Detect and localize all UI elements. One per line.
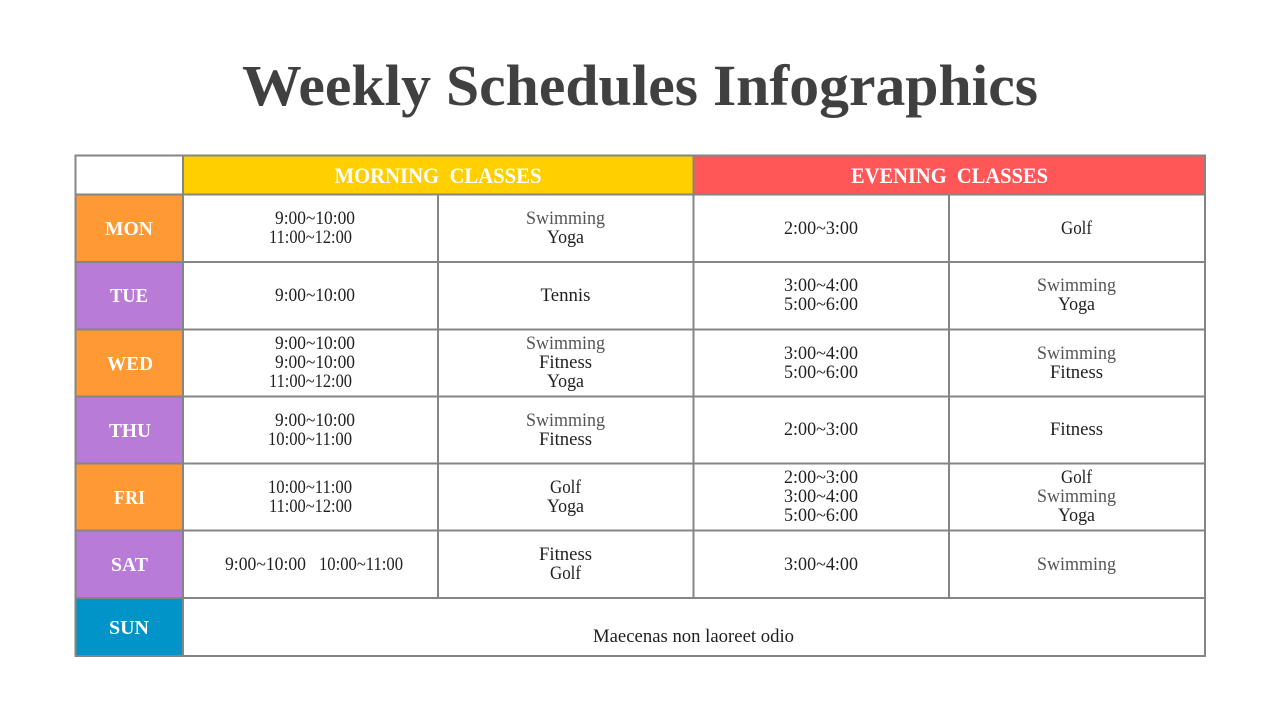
Friday classes: Yoga xyxy=(547,497,584,517)
Wednesday classes: Fitness xyxy=(539,353,592,373)
Wednesday classes: 9:00~10:00 xyxy=(275,334,355,354)
Monday classes: 11:00~12:00 xyxy=(269,228,352,248)
day: Monday: MON xyxy=(105,218,154,240)
title: Weekly Schedules Infographics xyxy=(242,53,1038,118)
Tuesday classes: 3:00~4:00 xyxy=(784,276,858,296)
Wednesday classes: Swimming xyxy=(1037,344,1116,364)
day: Monday xyxy=(76,194,183,262)
Wednesday classes: 11:00~12:00 xyxy=(269,372,352,392)
Tuesday classes: Tennis xyxy=(540,286,590,306)
Monday classes: 2:00~3:00 xyxy=(784,219,858,239)
Monday classes: Golf xyxy=(1061,219,1093,239)
Friday classes: 11:00~12:00 xyxy=(269,497,352,517)
day: Wednesday xyxy=(76,329,183,397)
Saturday classes: Fitness xyxy=(539,545,592,565)
Thursday classes: 10:00~11:00 xyxy=(268,430,352,450)
Friday classes: 5:00~6:00 xyxy=(784,506,858,526)
day: Tuesday: TUE xyxy=(110,285,148,307)
day: Thursday: THU xyxy=(109,420,151,442)
Saturday classes: Golf xyxy=(550,564,582,584)
Sunday note: Maecenas non laoreet odio xyxy=(593,627,794,647)
Saturday classes xyxy=(225,545,1116,584)
day: Friday xyxy=(76,464,183,531)
Saturday classes: 10:00~11:00 xyxy=(319,555,403,575)
Tuesday classes xyxy=(275,276,1116,315)
day: Sunday: SUN xyxy=(109,617,150,639)
Wednesday classes xyxy=(269,334,1116,392)
day: Thursday xyxy=(76,397,183,464)
Wednesday classes: Fitness xyxy=(1050,363,1103,383)
Wednesday classes: Swimming xyxy=(526,334,605,354)
day: Saturday xyxy=(76,531,183,598)
day: Saturday: SAT xyxy=(111,554,149,576)
Thursday classes xyxy=(268,411,1103,450)
Monday classes: Yoga xyxy=(547,228,584,248)
Friday classes: Golf xyxy=(1061,468,1093,488)
Friday classes xyxy=(268,468,1116,526)
Friday classes: Golf xyxy=(550,478,582,498)
Friday classes: Yoga xyxy=(1058,506,1095,526)
Wednesday classes: Yoga xyxy=(547,372,584,392)
day: Friday: FRI xyxy=(114,487,145,509)
schedule table xyxy=(75,155,1205,656)
day: Sunday xyxy=(76,598,183,656)
Friday classes: 3:00~4:00 xyxy=(784,487,858,507)
day: Tuesday xyxy=(76,262,183,329)
Saturday classes: 9:00~10:00 xyxy=(225,555,306,575)
Saturday classes: 3:00~4:00 xyxy=(784,555,858,575)
day: Wednesday: WED xyxy=(107,353,153,375)
Friday classes: 2:00~3:00 xyxy=(784,468,858,488)
Wednesday classes: 5:00~6:00 xyxy=(784,363,858,383)
header: morning classes: MORNING CLASSES xyxy=(334,163,542,188)
Monday classes: 9:00~10:00 xyxy=(275,209,355,229)
Thursday classes: Fitness xyxy=(539,430,592,450)
Tuesday classes: Yoga xyxy=(1058,295,1095,315)
Friday classes: Swimming xyxy=(1037,487,1116,507)
Monday classes xyxy=(269,209,1093,248)
Thursday classes: Fitness xyxy=(1050,420,1103,440)
Wednesday classes: 9:00~10:00 xyxy=(275,353,355,373)
Wednesday classes: 3:00~4:00 xyxy=(784,344,858,364)
Tuesday classes: 5:00~6:00 xyxy=(784,295,858,315)
Monday classes: Swimming xyxy=(526,209,605,229)
Thursday classes: Swimming xyxy=(526,411,605,431)
header: evening classes xyxy=(694,156,1205,194)
Saturday classes: Swimming xyxy=(1037,555,1116,575)
Thursday classes: 9:00~10:00 xyxy=(275,411,355,431)
Thursday classes: 2:00~3:00 xyxy=(784,420,858,440)
Tuesday classes: 9:00~10:00 xyxy=(275,286,355,306)
Friday classes: 10:00~11:00 xyxy=(268,478,352,498)
Tuesday classes: Swimming xyxy=(1037,276,1116,296)
header: evening classes: EVENING CLASSES xyxy=(851,163,1048,188)
header: morning classes xyxy=(183,156,694,194)
